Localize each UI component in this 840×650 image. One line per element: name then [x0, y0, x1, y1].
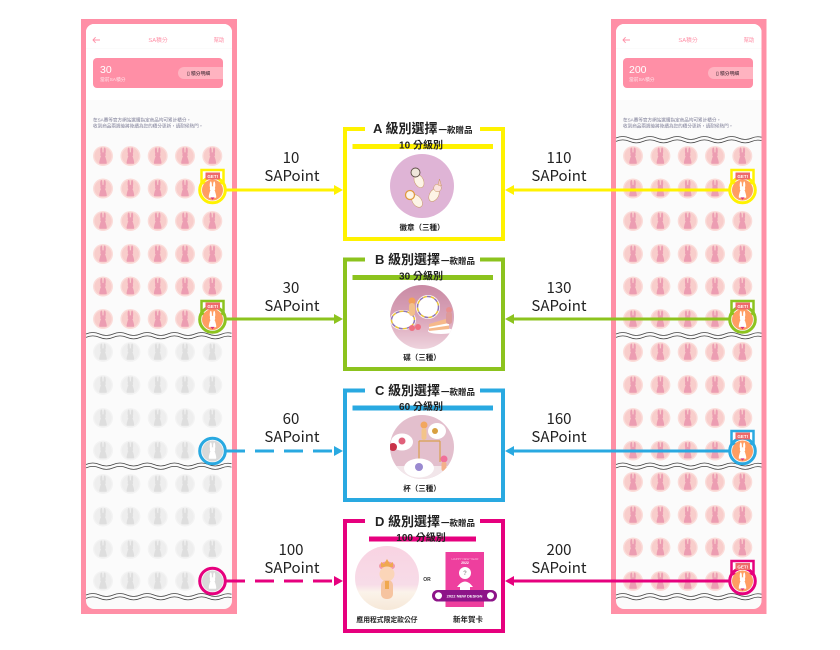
points summary card [616, 49, 762, 100]
points grid [623, 146, 752, 591]
new year card: HAPPY NEW YEAR [452, 557, 479, 561]
arrow: B left 30 SAPoint [226, 314, 343, 324]
box border [345, 521, 503, 631]
panel: level C [345, 383, 503, 500]
highlight: right blue GET coin: GET! [737, 434, 749, 439]
arrow: A left 10 SAPoint [226, 185, 343, 195]
level bar [352, 406, 493, 410]
phone frame [611, 19, 766, 614]
box border [345, 260, 503, 369]
label: 100 SAPoint: SAPoint [264, 557, 320, 578]
points grid [93, 146, 222, 591]
level bar [352, 144, 493, 149]
arrow: C left dashed 60 SAPoint [226, 446, 343, 456]
label: 200 SAPoint: 200 [547, 539, 571, 560]
highlight: left yellow GET coin: GET! [207, 174, 219, 179]
photo: plates [390, 285, 454, 349]
app header: 幫助 [214, 36, 224, 44]
caption: app limited figure: 應用程式限定款公仔 [356, 615, 418, 624]
box border [345, 390, 503, 500]
app header: 幫助 [744, 36, 754, 44]
label: 60 SAPoint: 60 [283, 408, 299, 429]
highlight: left green GET coin: GET! [207, 304, 219, 309]
points summary card: 當前SA積分 [100, 76, 126, 83]
highlight: left green GET coin [200, 301, 225, 332]
highlight: right yellow GET coin: GET! [737, 174, 749, 179]
highlight: right green GET coin [730, 301, 755, 332]
arrow: A right 110 SAPoint [505, 185, 729, 195]
label: 10 SAPoint: SAPoint [264, 165, 320, 186]
new design pill [432, 590, 497, 602]
caption: 碟（三種） [403, 352, 441, 362]
level bar [352, 275, 493, 280]
new year card: 2022 [461, 561, 469, 565]
photo: badges [390, 154, 454, 218]
points summary card: 200 [629, 64, 647, 76]
points summary card: 當前SA積分 [629, 76, 655, 83]
app header: SA積分 [148, 36, 168, 44]
phone frame [81, 19, 237, 614]
heading: D 級別選擇一款贈品 [375, 514, 475, 529]
box border [345, 129, 503, 239]
photo: app limited figure [355, 546, 419, 610]
level bar [369, 536, 476, 542]
app header [86, 24, 232, 48]
caption: 徽章（三種） [400, 222, 444, 232]
phone screen [616, 24, 762, 609]
description text [623, 116, 733, 130]
section break waves [86, 332, 232, 600]
level label: 10 分級別 [399, 138, 443, 152]
highlight: left magenta locked coin [200, 568, 225, 594]
level label: 100 分級別 [396, 531, 446, 544]
level label: 60 分級別 [399, 400, 443, 413]
panel: left phone 30 points [81, 19, 237, 614]
label: 160 SAPoint: SAPoint [531, 426, 587, 447]
highlight: right green GET coin: GET! [737, 304, 749, 309]
section break waves [616, 136, 762, 600]
app header: SA積分 [678, 36, 698, 44]
new year card [446, 552, 484, 607]
or text: OR [423, 577, 431, 583]
points summary card: 30 [100, 64, 112, 76]
highlight: right magenta GET coin: GET! [737, 564, 749, 569]
level label: 30 分級別 [399, 270, 443, 282]
new year card: ? [463, 571, 467, 577]
panel: right phone 200 points [611, 19, 766, 614]
label: 110 SAPoint: SAPoint [531, 165, 587, 186]
arrow: B right 130 SAPoint [505, 314, 729, 324]
heading: C 級別選擇一款贈品 [375, 383, 475, 398]
highlight: right yellow GET coin [730, 170, 755, 203]
label: 100 SAPoint: 100 [279, 539, 303, 560]
label: 130 SAPoint: SAPoint [531, 295, 587, 316]
label: 30 SAPoint: 30 [283, 277, 299, 298]
phone screen [86, 24, 232, 609]
points summary card: ▯ 積分明細 [716, 70, 739, 77]
arrow: C right 160 SAPoint [505, 446, 729, 456]
arrow: D left dashed 100 SAPoint [226, 576, 343, 586]
description text [93, 116, 203, 130]
highlight: left yellow GET coin [200, 170, 225, 203]
arrow: D right 200 SAPoint [505, 576, 729, 586]
highlight: right magenta GET coin [730, 561, 755, 594]
caption: new year card: 新年賀卡 [453, 614, 483, 624]
caption: 杯（三種） [403, 483, 441, 493]
heading: B 級別選擇一款贈品 [375, 252, 475, 267]
label: 10 SAPoint: 10 [283, 147, 299, 168]
label: 110 SAPoint: 110 [547, 147, 571, 168]
description text: 在SA賽等官方網站選購指定商品均可累計積分。 [623, 116, 721, 124]
panel: level D [345, 514, 503, 631]
label: 160 SAPoint: 160 [547, 408, 571, 429]
new design pill: 2022 NEW DESIGN [447, 594, 483, 598]
label: 200 SAPoint: SAPoint [531, 557, 587, 578]
points summary card: ▯ 積分明細 [187, 70, 210, 77]
app header [616, 24, 762, 48]
highlight: right blue GET coin [730, 431, 755, 464]
heading: A 級別選擇一款贈品 [373, 121, 473, 136]
panel: level A [345, 121, 503, 239]
points summary card [86, 49, 232, 100]
description text: 收到商品兩週後將陸續為您的積分更新，請耐候熱門。 [93, 122, 203, 130]
description text: 收到商品兩週後將陸續為您的積分更新，請耐候熱門。 [623, 122, 733, 130]
panel: level B [345, 252, 503, 369]
label: 30 SAPoint: SAPoint [264, 295, 320, 316]
label: 60 SAPoint: SAPoint [264, 426, 320, 447]
label: 130 SAPoint: 130 [547, 277, 571, 298]
highlight: left blue locked coin [200, 438, 225, 464]
description text: 在SA賽等官方網站選購指定商品均可累計積分。 [93, 116, 191, 124]
photo: cups [389, 415, 454, 480]
